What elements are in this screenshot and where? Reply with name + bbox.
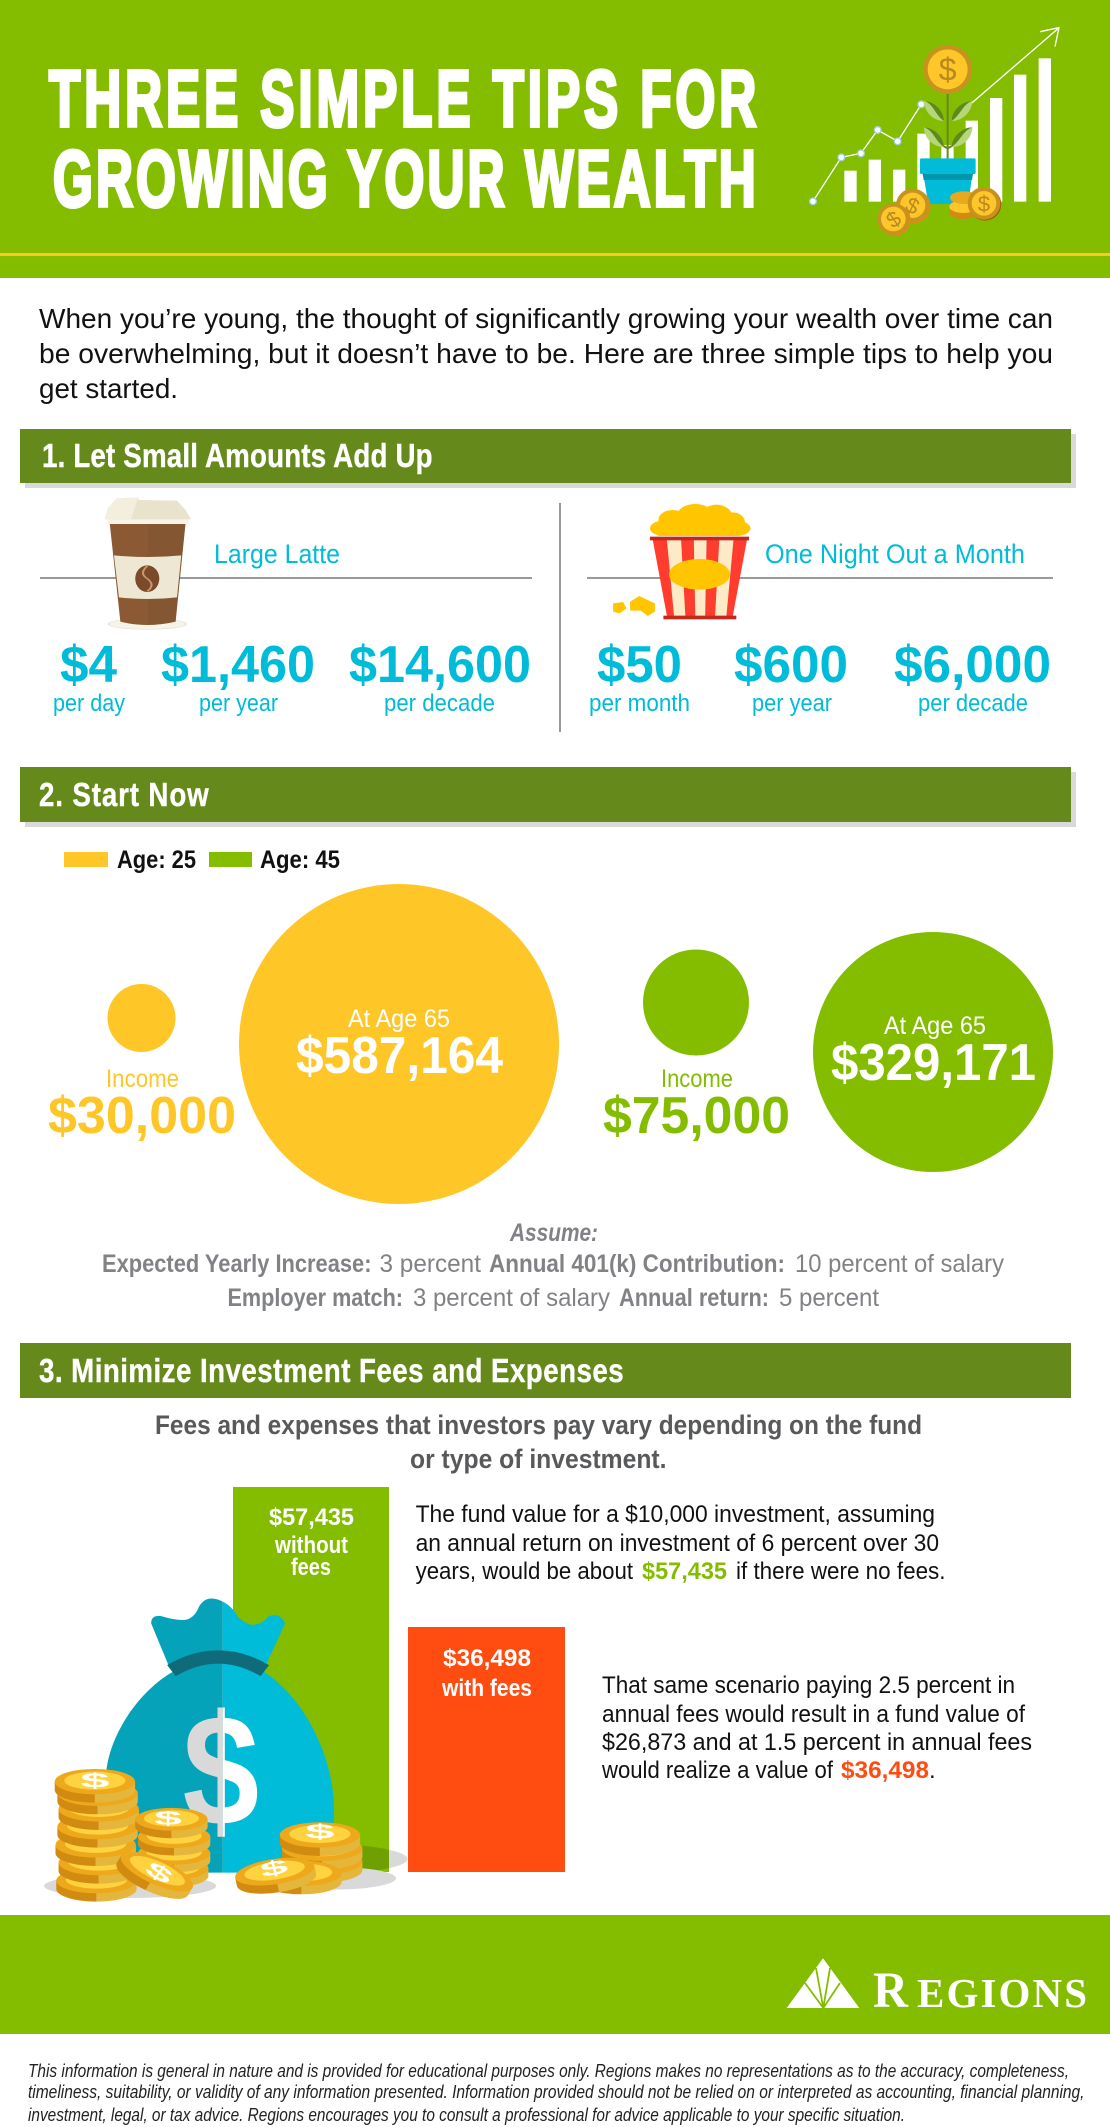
legal disclaimer <box>28 2061 1084 2125</box>
icon: money bag and coins: $ <box>154 1809 182 1829</box>
stat: $14,600 per decade: $14,600 <box>349 636 531 694</box>
icon: money bag and coins <box>44 1598 408 1907</box>
text block: no-fee scenario <box>416 1501 946 1585</box>
icon: growth chart with money plant <box>810 28 1059 236</box>
bar: without fees: without <box>274 1532 348 1559</box>
intro paragraph: get started. <box>39 373 178 404</box>
legend: Age: 25 <box>117 846 196 874</box>
section 2 heading bar <box>20 767 1076 827</box>
icon: growth chart with money plant: $ <box>902 192 923 220</box>
text block: no-fee scenario: if there were no fees. <box>736 1558 946 1585</box>
icon: Regions logo mark <box>787 1958 859 2008</box>
chart: age 25 bubbles <box>48 884 559 1204</box>
icon: growth chart with money plant: $ <box>978 191 990 216</box>
icon: coffee cup <box>105 497 191 629</box>
text block: with-fee scenario <box>601 1672 1032 1784</box>
assumptions text: Expected Yearly Increase: <box>102 1250 372 1278</box>
stat: $1,460 per year: per year <box>199 690 278 717</box>
chart: age 45 bubbles: $75,000 <box>603 1087 790 1145</box>
assumptions text <box>102 1219 1004 1312</box>
panel: one night out a month <box>587 504 1053 717</box>
section 1 heading bar: 1. Let Small Amounts Add Up <box>42 438 433 475</box>
legend: Age: 45 <box>260 846 340 874</box>
text block: no-fee scenario: an annual return on investment of 6 percent over 30 <box>416 1530 939 1557</box>
panel: large latte: Large Latte <box>214 539 340 569</box>
bar: without fees: fees <box>291 1554 331 1581</box>
stat: $6,000 per decade: per decade <box>918 690 1028 717</box>
stat: $1,460 per year: $1,460 <box>161 636 315 694</box>
chart: age 25 bubbles: $30,000 <box>48 1087 236 1145</box>
icon: money bag and coins: $ <box>183 1683 259 1859</box>
title <box>49 55 756 224</box>
icon: popcorn box <box>613 504 750 619</box>
section 3 subheading: or type of investment. <box>410 1444 666 1474</box>
stat: $600 per year: $600 <box>734 636 848 694</box>
header band <box>0 0 1110 278</box>
section 3 heading bar <box>20 1343 1071 1398</box>
panel: one night out a month: One Night Out a Month <box>765 539 1025 569</box>
chart: age 25 bubbles: Income <box>106 1065 179 1093</box>
Regions wordmark <box>873 1963 1087 2019</box>
section 3 subheading <box>155 1410 922 1474</box>
icon: money bag and coins: $ <box>183 1683 259 1859</box>
assumptions text: Assume: <box>509 1219 598 1247</box>
bar: with fees: $36,498 <box>443 1645 531 1672</box>
panel: large latte <box>40 497 532 717</box>
icon: money bag and coins: $ <box>258 1855 291 1882</box>
stat: $1,460 per year <box>161 636 315 717</box>
stat: $50 per month: per month <box>589 690 690 717</box>
assumptions text: 3 percent <box>380 1250 481 1278</box>
title: THREE SIMPLE TIPS FOR <box>49 55 756 144</box>
text block: with-fee scenario: $26,873 and at 1.5 percent in annual fees <box>602 1729 1032 1756</box>
section 1 heading bar <box>20 429 1076 488</box>
legend <box>64 846 340 874</box>
stat: $4 per day <box>53 636 125 717</box>
chart: age 25 bubbles: At Age 65 <box>348 1005 450 1033</box>
text block: with-fee scenario: That same scenario paying 2.5 percent in <box>602 1672 1015 1699</box>
assumptions text: 3 percent of salary <box>413 1284 610 1312</box>
chart: age 45 bubbles: At Age 65 <box>884 1012 986 1040</box>
icon: growth chart with money plant: $ <box>881 206 906 233</box>
bar: without fees: $57,435 <box>269 1504 354 1531</box>
text block: no-fee scenario: The fund value for a $10,000 investment, assuming <box>416 1501 935 1528</box>
chart: age 25 bubbles: $587,164 <box>296 1027 503 1085</box>
intro paragraph <box>39 303 1053 404</box>
bar: with fees: with fees <box>441 1675 532 1702</box>
assumptions text: Annual return: <box>619 1284 769 1312</box>
chart: age 45 bubbles: Income <box>661 1065 733 1093</box>
text block: with-fee scenario: annual fees would result in a fund value of <box>602 1701 1025 1728</box>
bar: with fees <box>408 1627 565 1872</box>
footer band with logo <box>0 1915 1110 2034</box>
text block: with-fee scenario: . <box>929 1757 936 1784</box>
text block: with-fee scenario: $36,498 <box>841 1757 929 1784</box>
text block: no-fee scenario: $57,435 <box>642 1558 727 1585</box>
section 2 heading bar: 2. Start Now <box>39 777 209 814</box>
stat: $50 per month <box>589 636 690 717</box>
stat: $50 per month: $50 <box>597 636 682 694</box>
assumptions text: 5 percent <box>779 1284 879 1312</box>
text block: with-fee scenario: would realize a value of <box>601 1757 833 1784</box>
assumptions text: Employer match: <box>228 1284 403 1312</box>
assumptions text: 10 percent of salary <box>795 1250 1004 1278</box>
title: GROWING YOUR WEALTH <box>53 135 756 224</box>
intro paragraph: be overwhelming, but it doesn’t have to be. Here are three simple tips to help you <box>39 338 1053 369</box>
Regions wordmark: EGIONS <box>917 1970 1087 2016</box>
stat: $4 per day: per day <box>53 690 125 717</box>
icon: growth chart with money plant: $ <box>939 52 957 88</box>
icon: money bag and coins: $ <box>141 1857 178 1889</box>
chart: age 45 bubbles <box>603 932 1053 1172</box>
legal disclaimer: investment, legal, or tax advice. Regions encourages you to consult a professional for advice applicable to your specific situation. <box>28 2105 905 2125</box>
icon: money bag and coins: $ <box>305 1821 335 1843</box>
stat: $14,600 per decade <box>349 636 531 717</box>
stat: $4 per day: $4 <box>60 636 117 694</box>
assumptions text: Annual 401(k) Contribution: <box>489 1250 785 1278</box>
icon: money bag and coins: $ <box>80 1770 110 1792</box>
Regions wordmark: R <box>873 1963 909 2019</box>
stat: $600 per year: per year <box>752 690 832 717</box>
intro paragraph: When you’re young, the thought of significantly growing your wealth over time can <box>39 303 1053 334</box>
bar: without fees <box>233 1487 389 1872</box>
chart: age 45 bubbles: $329,171 <box>831 1034 1036 1092</box>
section 3 heading bar: 3. Minimize Investment Fees and Expenses <box>39 1353 624 1390</box>
text block: no-fee scenario: years, would be about <box>416 1558 633 1585</box>
stat: $6,000 per decade: $6,000 <box>894 636 1051 694</box>
section 3 subheading: Fees and expenses that investors pay vary depending on the fund <box>155 1410 922 1440</box>
stat: $14,600 per decade: per decade <box>384 690 495 717</box>
